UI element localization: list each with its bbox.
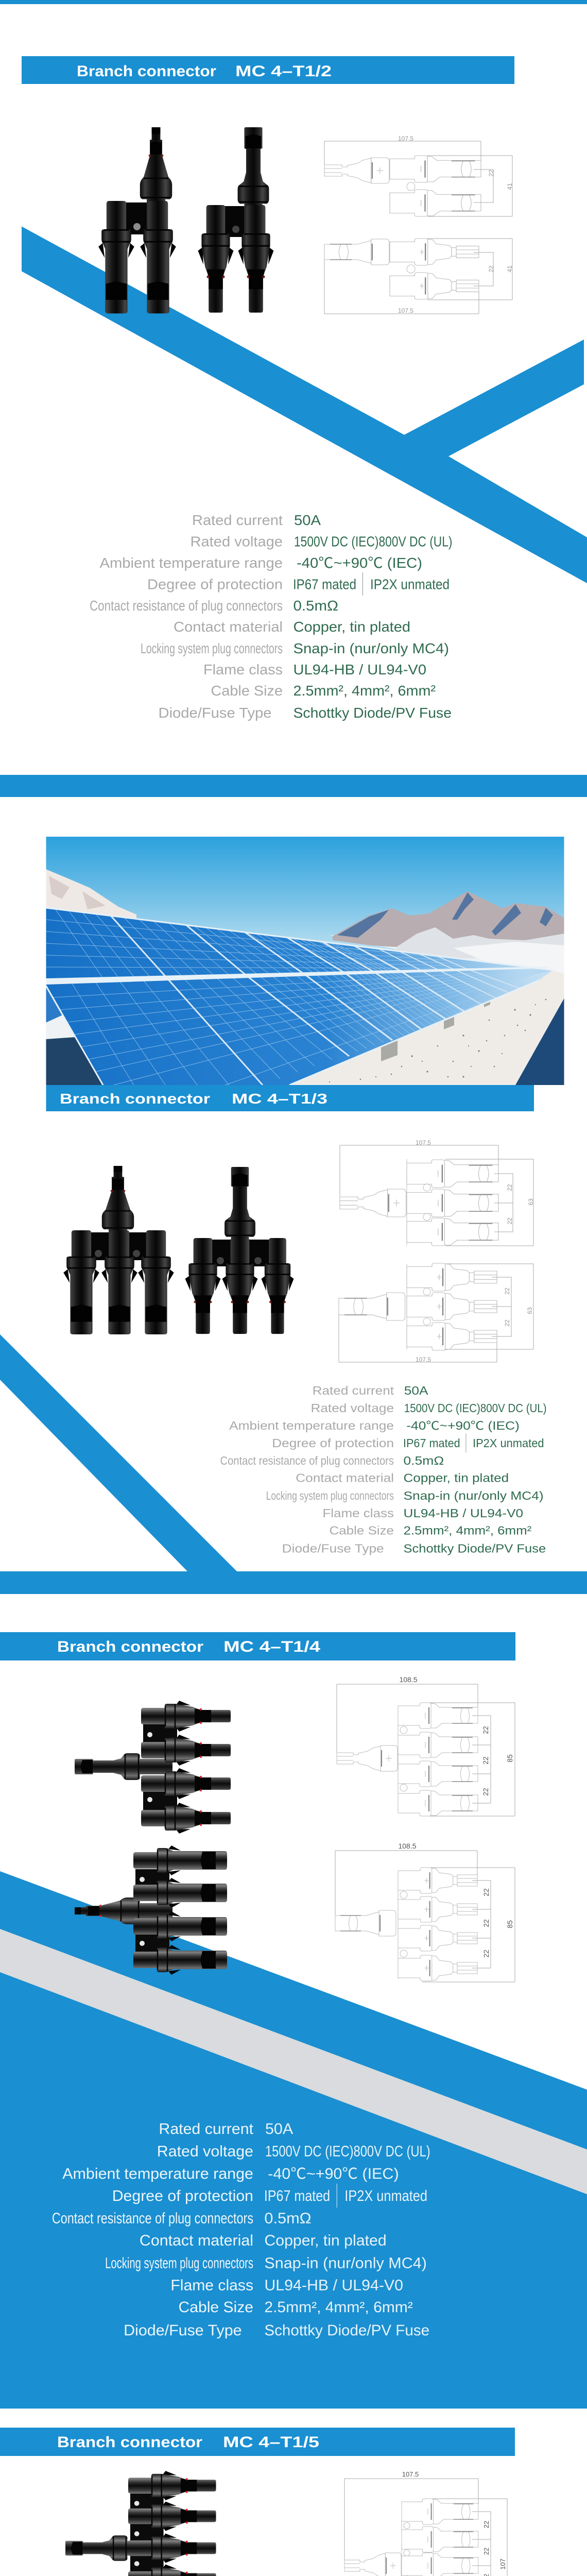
spec values: Schottky Diode/PV Fuse: [294, 705, 452, 721]
spec values: 2.5mm², 4mm², 6mm²: [264, 2299, 413, 2316]
technical drawing: T1/2 upper: [324, 135, 513, 216]
technical drawing: T1/4 lower: 22: [482, 1919, 490, 1927]
technical drawing: T1/3 upper: 107.5: [416, 1139, 431, 1146]
heading: T1/3: [60, 1091, 327, 1107]
panel: MC 4-T1/3 title bar: [46, 1085, 534, 1111]
decorative diagonal: section T1/2: [22, 227, 587, 583]
spec labels: [52, 2121, 253, 2339]
technical drawing: T1/2 lower: 41: [506, 265, 513, 273]
spec labels: Contact material: [174, 619, 283, 635]
spec values: IP2X unmated: [370, 576, 450, 592]
spec labels: Contact resistance of plug connectors: [52, 2211, 253, 2227]
spec labels: Diode/Fuse Type: [159, 705, 272, 721]
spec values: Copper, tin plated: [294, 619, 410, 635]
spec values: IP67 mated: [403, 1437, 460, 1450]
panel: MC 4-T1/2 title bar: [22, 56, 514, 84]
spec values: 0.5mΩ: [294, 598, 338, 614]
top blue band: [0, 0, 587, 4]
spec labels: Rated voltage: [310, 1402, 394, 1415]
spec labels: Locking system plug connectors: [105, 2255, 253, 2272]
technical drawing: T1/4 lower: [335, 1842, 515, 1982]
decorative diagonal: section T1/3: [0, 1334, 237, 1571]
technical drawing: T1/2 lower: 107.5: [398, 307, 413, 314]
spec labels: Cable Size: [179, 2299, 253, 2316]
product photo: T1/3 connector, tube trunk: [185, 1167, 294, 1334]
spec labels: Rated current: [159, 2121, 253, 2138]
spec values: Copper, tin plated: [264, 2232, 387, 2249]
spec labels: Degree of protection: [147, 576, 283, 592]
heading: T1/2: Branch connector: [77, 63, 216, 80]
heading: T1/4: MC 4–T1/4: [223, 1638, 320, 1655]
heading: T1/2: [77, 63, 332, 80]
spec table: T1/2: [90, 512, 452, 721]
spec table: T1/4: [52, 2121, 430, 2339]
spec table: T1/3: [220, 1384, 547, 1555]
photo: solar panels and mountains: [46, 837, 565, 1108]
heading: T1/5: Branch connector: [57, 2434, 202, 2451]
spec values: 0.5mΩ: [264, 2211, 312, 2227]
heading: T1/2: MC 4–T1/2: [235, 63, 332, 80]
spec labels: Contact material: [140, 2232, 253, 2249]
heading: T1/4: [57, 1638, 320, 1655]
technical drawing: T1/3 upper: 22: [506, 1184, 513, 1191]
technical drawing: T1/3 upper: 22: [506, 1217, 513, 1225]
technical drawing: T1/3 lower: 63: [526, 1307, 533, 1314]
spec values: Snap-in (nur/only MC4): [264, 2255, 427, 2272]
spec values: -40℃~+90℃ (IEC): [406, 1419, 520, 1433]
spec labels: Rated current: [313, 1384, 394, 1398]
spec values: -40℃~+90℃ (IEC): [268, 2166, 399, 2182]
spec values: 50A: [294, 512, 321, 528]
spec values: IP2X unmated: [344, 2188, 427, 2205]
heading: T1/3: Branch connector: [60, 1091, 210, 1107]
spec values: 2.5mm², 4mm², 6mm²: [403, 1524, 531, 1537]
spec labels: Contact material: [296, 1472, 394, 1485]
spec values: 0.5mΩ: [403, 1454, 444, 1468]
spec labels: Contact resistance of plug connectors: [220, 1454, 394, 1468]
spec labels: Degree of protection: [272, 1437, 394, 1450]
product photo: T1/2 connector, pin trunk: [98, 127, 176, 313]
spec labels: [90, 512, 283, 721]
spec values: 50A: [265, 2121, 294, 2138]
spec values: Snap-in (nur/only MC4): [403, 1489, 544, 1503]
technical drawing: T1/4 upper: 22: [481, 1788, 490, 1796]
spec labels: [220, 1384, 394, 1555]
spec values: IP2X unmated: [473, 1437, 544, 1450]
spec labels: Degree of protection: [112, 2188, 253, 2205]
technical drawing: T1/3 lower: 22: [504, 1287, 511, 1295]
technical drawing: T1/4 lower: 85: [506, 1920, 514, 1928]
spec values: UL94-HB / UL94-V0: [294, 662, 426, 677]
spec labels: Diode/Fuse Type: [124, 2323, 242, 2339]
spec labels: Diode/Fuse Type: [282, 1543, 384, 1555]
technical drawing: T1/3 lower: 22: [504, 1319, 511, 1327]
spec labels: Ambient temperature range: [100, 555, 283, 571]
product photo: T1/4 connector, tube trunk: [75, 1701, 231, 1834]
spec labels: Cable Size: [211, 683, 283, 699]
technical drawing: T1/2 upper: 41: [506, 183, 513, 190]
panel: MC 4-T1/5 title bar: [0, 2428, 515, 2456]
heading: T1/5: [57, 2434, 319, 2451]
technical drawing: T1/4 upper: 108.5: [399, 1675, 418, 1684]
technical drawing: T1/3 upper: [340, 1139, 534, 1246]
spec values: Schottky Diode/PV Fuse: [264, 2323, 429, 2339]
spec labels: Locking system plug connectors: [266, 1489, 394, 1503]
spec values: 1500V DC (IEC)800V DC (UL): [404, 1402, 547, 1415]
technical drawing: T1/2 upper: 107.5: [398, 135, 413, 142]
technical drawing: T1/4 upper: 22: [481, 1726, 490, 1734]
spec values: IP67 mated: [264, 2188, 330, 2205]
spec values: 2.5mm², 4mm², 6mm²: [294, 683, 436, 699]
spec values: -40℃~+90℃ (IEC): [297, 555, 422, 571]
spec labels: Flame class: [170, 2277, 253, 2294]
technical drawing: T1/5 upper: 22: [482, 2521, 490, 2528]
technical drawing: T1/2 upper: 22: [488, 170, 495, 177]
technical drawing: T1/3 upper: 63: [527, 1198, 534, 1206]
spec values: UL94-HB / UL94-V0: [403, 1507, 523, 1520]
technical drawing: T1/3 lower: [339, 1263, 533, 1363]
blue divider band 2: [0, 1571, 587, 1594]
blue divider band 1: [0, 775, 587, 797]
technical drawing: T1/5 upper: 107: [499, 2558, 507, 2570]
blue background with grey stripe: section T1/4: [0, 1871, 587, 2409]
product photo: T1/2 connector, tube trunk: [198, 127, 274, 313]
technical drawing: T1/5 upper: 107.5: [402, 2470, 419, 2478]
technical drawing: T1/5 upper: 22: [482, 2548, 490, 2555]
heading: T1/4: Branch connector: [57, 1638, 203, 1655]
spec values: Schottky Diode/PV Fuse: [403, 1543, 546, 1555]
spec values: [264, 2121, 430, 2339]
technical drawing: T1/3 lower: 107.5: [416, 1356, 431, 1363]
product photo: T1/3 connector, pin trunk: [63, 1166, 174, 1334]
product photo: T1/4 connector, pin trunk: [75, 1845, 227, 1975]
spec labels: Ambient temperature range: [229, 1419, 394, 1433]
spec values: IP67 mated: [293, 576, 356, 592]
spec labels: Ambient temperature range: [62, 2166, 253, 2182]
spec values: UL94-HB / UL94-V0: [264, 2277, 403, 2294]
product photo: T1/5 connector, tube trunk: [65, 2471, 216, 2576]
spec labels: Cable Size: [329, 1524, 394, 1537]
spec values: [403, 1384, 547, 1555]
technical drawing: T1/4 upper: 22: [481, 1756, 490, 1765]
spec labels: Flame class: [322, 1507, 394, 1520]
panel: MC 4-T1/4 title bar: [0, 1632, 515, 1660]
technical drawing: T1/4 lower: 22: [482, 1950, 490, 1958]
spec labels: Rated voltage: [191, 534, 283, 549]
spec values: [293, 512, 452, 721]
spec labels: Rated voltage: [157, 2143, 253, 2160]
heading: T1/3: MC 4–T1/3: [232, 1091, 327, 1107]
spec values: 1500V DC (IEC)800V DC (UL): [294, 534, 452, 549]
technical drawing: T1/4 lower: 108.5: [398, 1842, 417, 1850]
technical drawing: T1/4 upper: 85: [506, 1754, 514, 1762]
technical drawing: T1/5 upper: [344, 2470, 507, 2576]
heading: T1/5: MC 4–T1/5: [223, 2434, 319, 2451]
spec values: 1500V DC (IEC)800V DC (UL): [265, 2143, 430, 2160]
spec labels: Contact resistance of plug connectors: [90, 598, 283, 614]
spec values: Copper, tin plated: [403, 1472, 509, 1485]
technical drawing: T1/2 lower: 22: [488, 265, 495, 273]
spec labels: Flame class: [203, 662, 283, 677]
spec labels: Rated current: [192, 512, 283, 528]
spec values: Snap-in (nur/only MC4): [294, 640, 449, 656]
spec labels: Locking system plug connectors: [141, 640, 283, 656]
technical drawing: T1/2 lower: [324, 239, 513, 314]
spec values: 50A: [404, 1384, 429, 1398]
technical drawing: T1/4 lower: 22: [482, 1888, 490, 1896]
technical drawing: T1/4 upper: [337, 1675, 515, 1816]
